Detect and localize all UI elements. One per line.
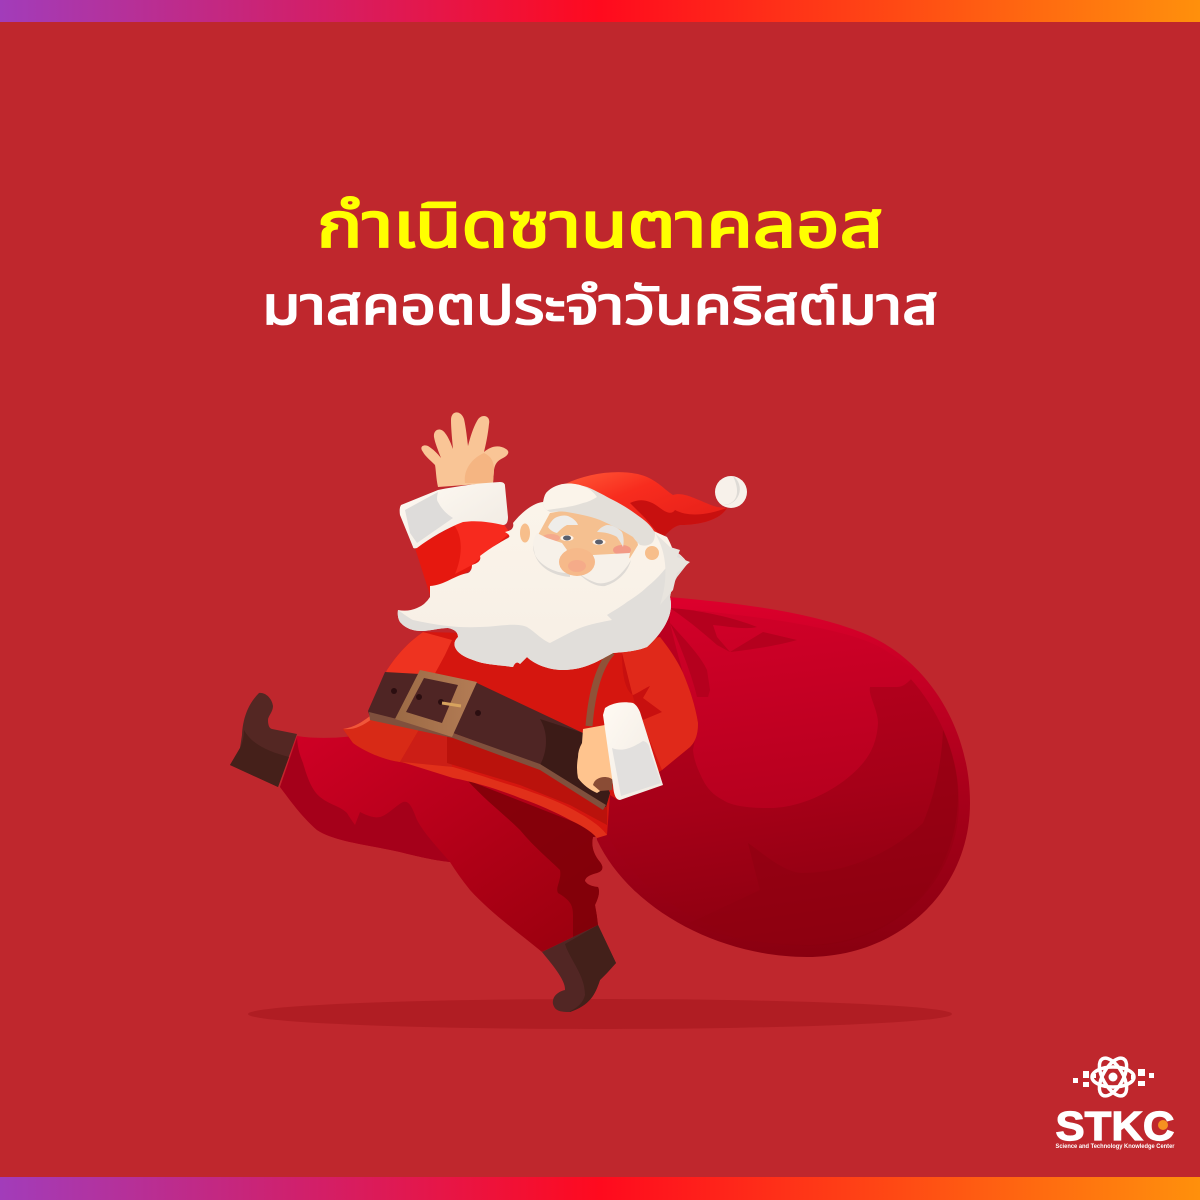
hem right dark panel bbox=[447, 727, 607, 825]
hat brim bbox=[543, 484, 655, 546]
subtitle: มาสคอตประจำวันคริสต์มาส bbox=[262, 277, 938, 336]
face bbox=[537, 511, 638, 570]
inner arm shade bbox=[622, 653, 662, 720]
bottom gradient bar bbox=[0, 1177, 1200, 1200]
nose bbox=[559, 548, 595, 576]
hem flap bbox=[343, 716, 420, 762]
right arm bbox=[622, 637, 698, 770]
buckle bbox=[395, 670, 477, 737]
lower hand bbox=[577, 725, 613, 793]
cheeks and eyes bbox=[542, 534, 631, 555]
hat bbox=[565, 472, 727, 538]
right hair shade bbox=[655, 533, 690, 605]
hat pompom bbox=[715, 476, 747, 508]
raised cuff bbox=[400, 482, 508, 548]
back boot bbox=[230, 693, 297, 787]
title: กำเนิดซานตาคลอส bbox=[317, 191, 883, 261]
moustache bbox=[533, 533, 631, 586]
hem highlight band bbox=[402, 762, 607, 838]
top gradient bar bbox=[0, 0, 1200, 22]
belt bbox=[368, 672, 610, 810]
lower cuff bbox=[603, 702, 663, 800]
logo caption: Science and Technology Knowledge Center bbox=[1056, 1144, 1175, 1150]
raised arm sleeve bbox=[415, 520, 510, 595]
eyebrows bbox=[548, 516, 624, 547]
ground shadow bbox=[248, 999, 952, 1029]
trousers bbox=[280, 733, 607, 952]
ears bbox=[520, 524, 659, 560]
beard shade bbox=[398, 550, 688, 670]
sack bbox=[590, 597, 970, 957]
left shoulder panel bbox=[373, 632, 452, 700]
coat body bbox=[343, 632, 698, 838]
logo: STKC bbox=[1056, 1054, 1175, 1150]
logo atom icon bbox=[1073, 1054, 1154, 1100]
logo wordmark: STKC bbox=[1056, 1103, 1174, 1149]
illustration: Santa Claus with sack bbox=[230, 412, 970, 1012]
logo dot bbox=[1158, 1120, 1168, 1130]
front boot bbox=[542, 925, 616, 1012]
strap bbox=[589, 652, 612, 726]
raised hand bbox=[421, 412, 508, 487]
beard and hair bbox=[398, 502, 688, 670]
